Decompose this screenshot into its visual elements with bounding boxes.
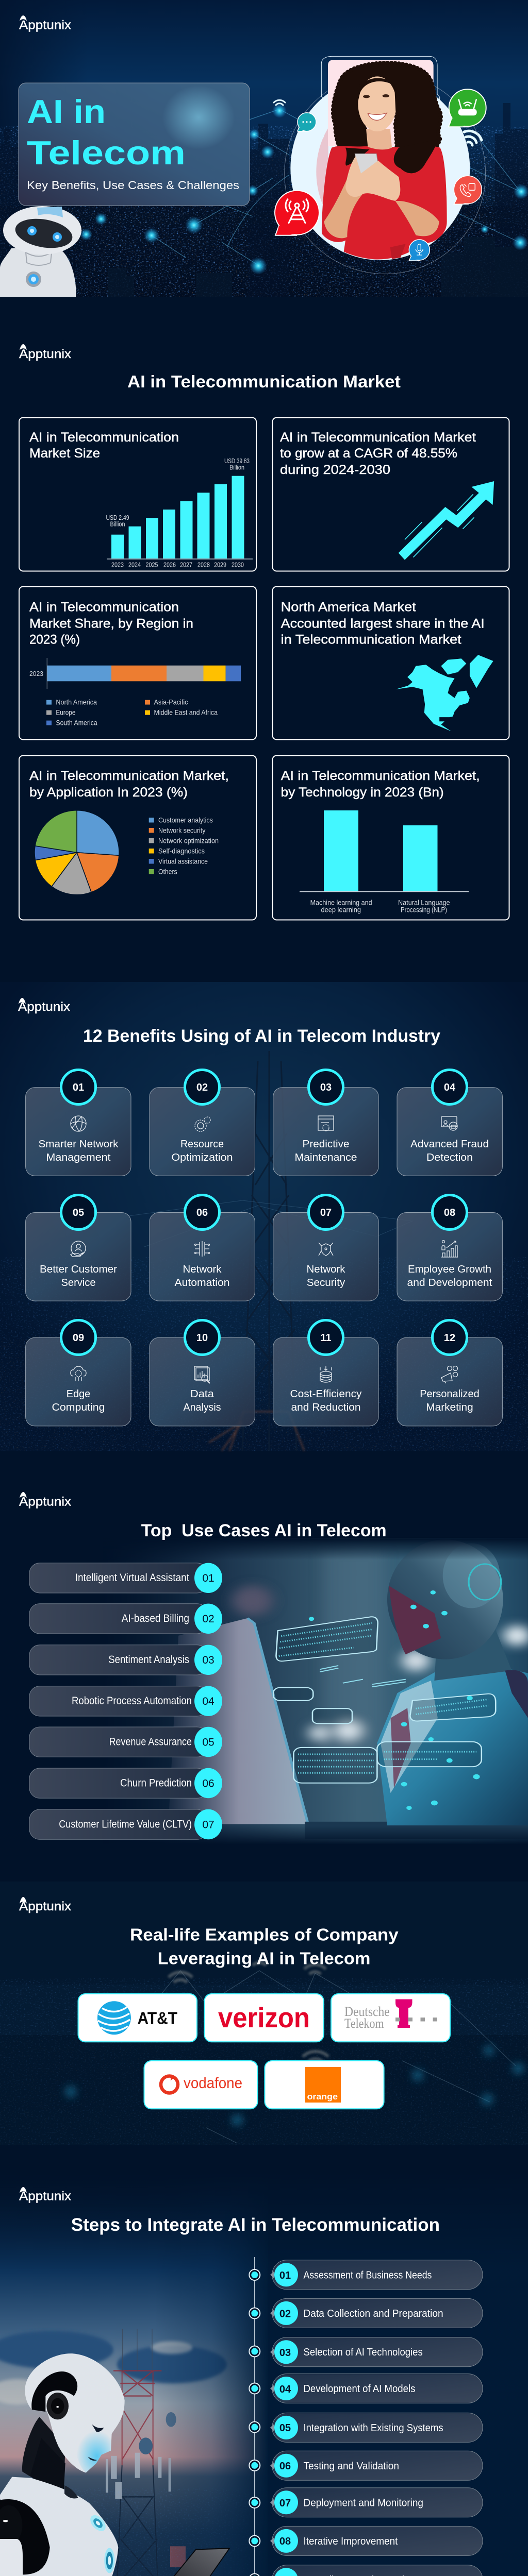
legend: Network optimization — [158, 837, 219, 845]
use case 06 — [29, 1768, 222, 1798]
panel heading: Market Share, by Region in — [29, 616, 193, 631]
panel heading — [29, 769, 229, 800]
heading: 12 Benefits Using of AI in Telecom Industry — [83, 1026, 440, 1046]
step 01: Assessment of Business Needs — [303, 2270, 432, 2281]
step 06: 06 — [279, 2461, 291, 2472]
panel heading: in Telecommunication Market — [281, 633, 461, 647]
card: 05: Better Customer — [40, 1264, 117, 1275]
section: hero — [0, 0, 528, 297]
section: integration steps — [0, 2187, 528, 2576]
icon: green router bubble — [449, 89, 486, 127]
section: market — [19, 344, 509, 920]
legend: North America — [56, 698, 97, 706]
panel heading: 2023 (%) — [29, 633, 80, 647]
logo: Apptunix — [19, 1495, 71, 1509]
icon: shield with nodes — [319, 1243, 333, 1256]
card: 11: Cost-Efficiency — [290, 1388, 362, 1400]
card: 01: Management — [46, 1152, 111, 1163]
card: 05 — [26, 1195, 131, 1301]
step 05: Integration with Existing Systems — [303, 2422, 443, 2434]
panel heading: to grow at a CAGR of 48.55% — [280, 446, 457, 461]
step 05 — [270, 2413, 483, 2442]
bar chart: USD 2.49 — [106, 514, 129, 521]
bar chart: 2026 — [163, 561, 176, 569]
icon: chart with magnifier — [194, 1366, 210, 1383]
bar chart: deep learning — [321, 906, 361, 914]
panel: market size — [19, 417, 256, 571]
logo card: Deutsche Telekom: Telekom — [344, 2016, 384, 2031]
logo card: Orange — [265, 2061, 384, 2109]
use case 03: Sentiment Analysis — [108, 1654, 189, 1666]
card: 10: Data — [190, 1388, 214, 1400]
tower and city background — [0, 982, 528, 1451]
icon: cloud with gear — [71, 1366, 86, 1381]
step 04: Development of AI Models — [303, 2383, 415, 2395]
panel: CAGR growth — [272, 417, 509, 571]
heading: Top Use Cases AI in Telecom — [141, 1521, 387, 1540]
step 04 — [270, 2374, 483, 2403]
card: 02: Optimization — [171, 1152, 233, 1163]
card: 04: 04 — [444, 1082, 456, 1093]
panel heading: Market Size — [29, 446, 100, 461]
legend: Virtual assistance — [158, 857, 208, 866]
card: 05: 05 — [73, 1207, 84, 1218]
arms and hands — [324, 179, 362, 238]
use case 05 — [29, 1727, 222, 1757]
logo: Apptunix — [19, 19, 71, 32]
card: 04 — [397, 1070, 502, 1176]
logo card: AT&T: AT&T — [137, 2009, 177, 2028]
logo: Apptunix — [19, 1900, 71, 1913]
card: 02: 02 — [196, 1082, 208, 1093]
step 01 — [270, 2260, 483, 2290]
icon: Telekom T — [395, 1999, 437, 2028]
step 02 — [270, 2298, 483, 2328]
hero night city background — [0, 0, 528, 297]
logo card: Vodafone: vodafone — [184, 2075, 242, 2092]
card: 09: 09 — [73, 1332, 84, 1344]
logo card: Verizon — [204, 1994, 324, 2042]
card: 03: 03 — [320, 1082, 332, 1093]
icon: coral call bubble — [454, 176, 482, 204]
stacked bar chart: 2023 — [29, 670, 43, 677]
step 03 — [270, 2337, 483, 2367]
pie chart — [35, 810, 119, 895]
card: 10: 10 — [196, 1332, 208, 1344]
bar chart: 2030 — [232, 561, 244, 569]
panel: by application — [19, 755, 256, 920]
icon: browser with gear — [318, 1116, 334, 1131]
use case 07: Customer Lifetime Value (CLTV) — [59, 1819, 192, 1830]
panel heading: AI in Telecommunication Market, — [281, 769, 480, 783]
use case 05: Revenue Assurance — [109, 1736, 192, 1748]
card: 03: Maintenance — [295, 1152, 357, 1163]
shirt — [322, 146, 447, 259]
section: use cases — [19, 1492, 528, 1842]
use case 04: 04 — [202, 1696, 214, 1707]
step 04: 04 — [279, 2384, 291, 2395]
timeline — [249, 2257, 260, 2576]
icon: megaphone — [441, 1366, 458, 1383]
card: 07: Network — [306, 1264, 346, 1275]
card: 11 — [273, 1320, 378, 1426]
step 03: Selection of AI Technologies — [303, 2347, 423, 2358]
card: 03: Predictive — [302, 1139, 350, 1150]
heading: AI in Telecommunication Market — [127, 372, 401, 391]
logo: Apptunix — [18, 1000, 70, 1014]
icon: AT&T globe — [97, 2001, 131, 2035]
use case 02 — [29, 1604, 222, 1634]
panel heading: North America Market — [281, 600, 416, 614]
bar chart: 2028 — [197, 561, 210, 569]
panel heading: by Technology in 2023 (Bn) — [281, 785, 444, 800]
icon: teal chat bubble — [298, 113, 316, 131]
card: 05: Service — [61, 1277, 96, 1289]
icon: growth bars and person — [441, 1241, 458, 1257]
card: 08: 08 — [444, 1207, 455, 1218]
panel heading: Accounted largest share in the AI — [281, 616, 485, 631]
use case 03 — [29, 1645, 222, 1675]
panel heading — [29, 600, 193, 647]
panel: North America — [272, 586, 509, 740]
card: 09: Computing — [52, 1402, 105, 1413]
hair — [333, 63, 441, 172]
card: 03 — [273, 1070, 378, 1176]
card: 04: Advanced Fraud — [410, 1139, 489, 1150]
icon: user window and lock — [441, 1116, 457, 1130]
icon: Vodafone speechmark — [161, 2075, 178, 2093]
use case 01: Intelligent Virtual Assistant — [75, 1572, 189, 1584]
panel heading: AI in Telecommunication Market, — [29, 769, 229, 783]
use case 04: Robotic Process Automation — [72, 1695, 192, 1707]
step 03: 03 — [279, 2347, 291, 2359]
icon: customer in hand — [71, 1241, 86, 1257]
icon: globe network — [71, 1116, 86, 1131]
icon: circuit brain — [195, 1241, 209, 1257]
card: 07: Security — [307, 1277, 345, 1289]
bar chart: 2025 — [145, 561, 158, 569]
heading — [130, 1925, 399, 1968]
step 09 — [270, 2565, 483, 2576]
use case 04 — [29, 1686, 222, 1716]
subtitle: Key Benefits, Use Cases & Challenges — [27, 179, 239, 192]
bar chart: 2029 — [214, 561, 226, 569]
card: 06: Automation — [174, 1277, 230, 1289]
panel heading — [29, 430, 179, 461]
use case 01 — [29, 1563, 222, 1593]
panel: by technology — [272, 755, 509, 920]
panel heading: AI in Telecommunication — [29, 600, 179, 614]
card: 06: 06 — [196, 1207, 208, 1218]
neck and face — [366, 129, 392, 149]
legend: Middle East and Africa — [154, 708, 218, 716]
legend: Customer analytics — [158, 816, 213, 824]
panel: share by region — [19, 586, 256, 740]
logo card: Deutsche Telekom: Deutsche — [344, 2004, 390, 2019]
card: 11: 11 — [320, 1332, 332, 1344]
use case 03: 03 — [202, 1654, 214, 1666]
legend: South America — [56, 718, 97, 726]
card: 09: Edge — [67, 1388, 90, 1400]
bar chart: Billion — [229, 464, 244, 471]
step 07: Deployment and Monitoring — [303, 2498, 423, 2509]
legend: Self-diagnostics — [158, 847, 205, 855]
logo: Apptunix — [19, 2190, 71, 2204]
bar chart: Machine learning and — [310, 899, 372, 907]
bar chart: Natural Language — [398, 899, 450, 907]
card: 01: 01 — [73, 1082, 84, 1093]
icon: blue microphone bubble — [409, 240, 430, 261]
icon: coin stacks — [320, 1366, 332, 1382]
logo card: Orange: orange — [307, 2092, 338, 2102]
section: benefits — [0, 982, 528, 1452]
title: AI in Telecom — [27, 93, 186, 172]
bar chart: USD 39.83 — [224, 457, 250, 465]
bar chart — [106, 457, 253, 569]
bar chart: Processing (NLP) — [401, 906, 447, 914]
legend — [46, 698, 218, 726]
logo card: AT&T — [78, 1994, 197, 2042]
bar chart: Billion — [110, 520, 125, 528]
logo card: Deutsche Telekom — [331, 1994, 450, 2042]
icon: gears — [195, 1117, 210, 1131]
map: North America — [395, 655, 493, 731]
robot holding tablet — [0, 2353, 229, 2576]
card: 08 — [397, 1195, 502, 1301]
use case 05: 05 — [202, 1736, 214, 1749]
stacked bar chart — [29, 658, 241, 689]
title panel — [19, 83, 250, 206]
card: 09 — [26, 1320, 131, 1426]
use case 02: 02 — [202, 1613, 214, 1625]
legend: Network security — [158, 826, 205, 834]
panel heading: during 2024-2030 — [280, 463, 390, 477]
bar chart: 2024 — [128, 561, 141, 569]
card: 12: Marketing — [426, 1402, 473, 1413]
title: AI in Telecom: Telecom — [27, 134, 186, 172]
card: 08: Employee Growth — [408, 1264, 491, 1275]
step 07: 07 — [279, 2498, 291, 2509]
bar chart — [300, 810, 469, 914]
card: 08: and Development — [407, 1277, 492, 1289]
use case 06: Churn Prediction — [120, 1777, 192, 1789]
sky and telecom tower background — [0, 2172, 528, 2576]
heading: Leveraging AI in Telecom — [158, 1949, 370, 1968]
bar chart: 2027 — [180, 561, 192, 569]
heading: Steps to Integrate AI in Telecommunication — [71, 2215, 440, 2235]
panel heading: by Application In 2023 (%) — [29, 785, 188, 800]
hero woman with phone — [285, 56, 486, 274]
step 08: Iterative Improvement — [303, 2536, 398, 2547]
use case 07: 07 — [202, 1819, 214, 1831]
card: 10: Analysis — [184, 1402, 221, 1413]
heading: Real-life Examples of Company — [130, 1925, 399, 1944]
dim city network background — [0, 1882, 528, 2145]
step 01: 01 — [279, 2270, 291, 2281]
use case 01: 01 — [202, 1572, 214, 1584]
use case 07 — [29, 1809, 222, 1839]
icon: large wifi signal — [464, 131, 482, 145]
step 02: 02 — [279, 2308, 291, 2319]
hair falling over shirt — [345, 139, 438, 173]
card: 01 — [26, 1070, 131, 1176]
card: 11: and Reduction — [291, 1402, 361, 1413]
card: 04: Detection — [426, 1152, 473, 1163]
card: 07: 07 — [320, 1207, 332, 1218]
arrow: rising growth — [399, 481, 494, 560]
panel heading: AI in Telecommunication — [29, 430, 179, 445]
phone — [355, 154, 380, 177]
legend: Europe — [56, 708, 76, 716]
step 08: 08 — [279, 2536, 291, 2547]
legend: Asia-Pacific — [154, 698, 188, 706]
section: real-life examples — [0, 1897, 528, 2145]
step 06: Testing and Validation — [303, 2461, 399, 2472]
logo card: Vodafone — [144, 2061, 258, 2109]
legend: Others — [158, 867, 177, 875]
bar chart: 2023 — [111, 561, 124, 569]
card: 06 — [150, 1195, 255, 1301]
card: 06: Network — [183, 1264, 222, 1275]
step 06 — [270, 2451, 483, 2480]
panel heading — [281, 600, 485, 647]
icon: wifi signal over city — [274, 100, 285, 105]
use case 02: AI-based Billing — [122, 1613, 189, 1624]
logo: Apptunix — [19, 347, 71, 361]
step 05: 05 — [279, 2422, 291, 2434]
card: 10 — [150, 1320, 255, 1426]
AI robot and laptop illustration — [103, 1538, 528, 1844]
card: 12: Personalized — [420, 1388, 480, 1400]
logo card: Verizon: verizon — [218, 2002, 310, 2033]
panel heading: AI in Telecommunication Market — [280, 430, 476, 445]
step 08 — [270, 2526, 483, 2555]
step 02: Data Collection and Preparation — [303, 2308, 443, 2319]
card: 07 — [273, 1195, 378, 1301]
panel heading — [280, 430, 476, 477]
panel heading — [281, 769, 480, 800]
card: 01: Smarter Network — [38, 1139, 119, 1150]
title: AI in Telecom: AI in — [27, 93, 106, 130]
icon: red tower bubble — [275, 191, 319, 235]
card: 12: 12 — [444, 1332, 455, 1344]
waist knot — [390, 244, 406, 259]
hero robot mascot — [0, 206, 81, 297]
card: 02 — [150, 1070, 255, 1176]
card: 12 — [397, 1320, 502, 1426]
card: 02: Resource — [180, 1139, 224, 1150]
use case 06: 06 — [202, 1777, 214, 1790]
legend — [149, 816, 219, 875]
step 07 — [270, 2488, 483, 2517]
